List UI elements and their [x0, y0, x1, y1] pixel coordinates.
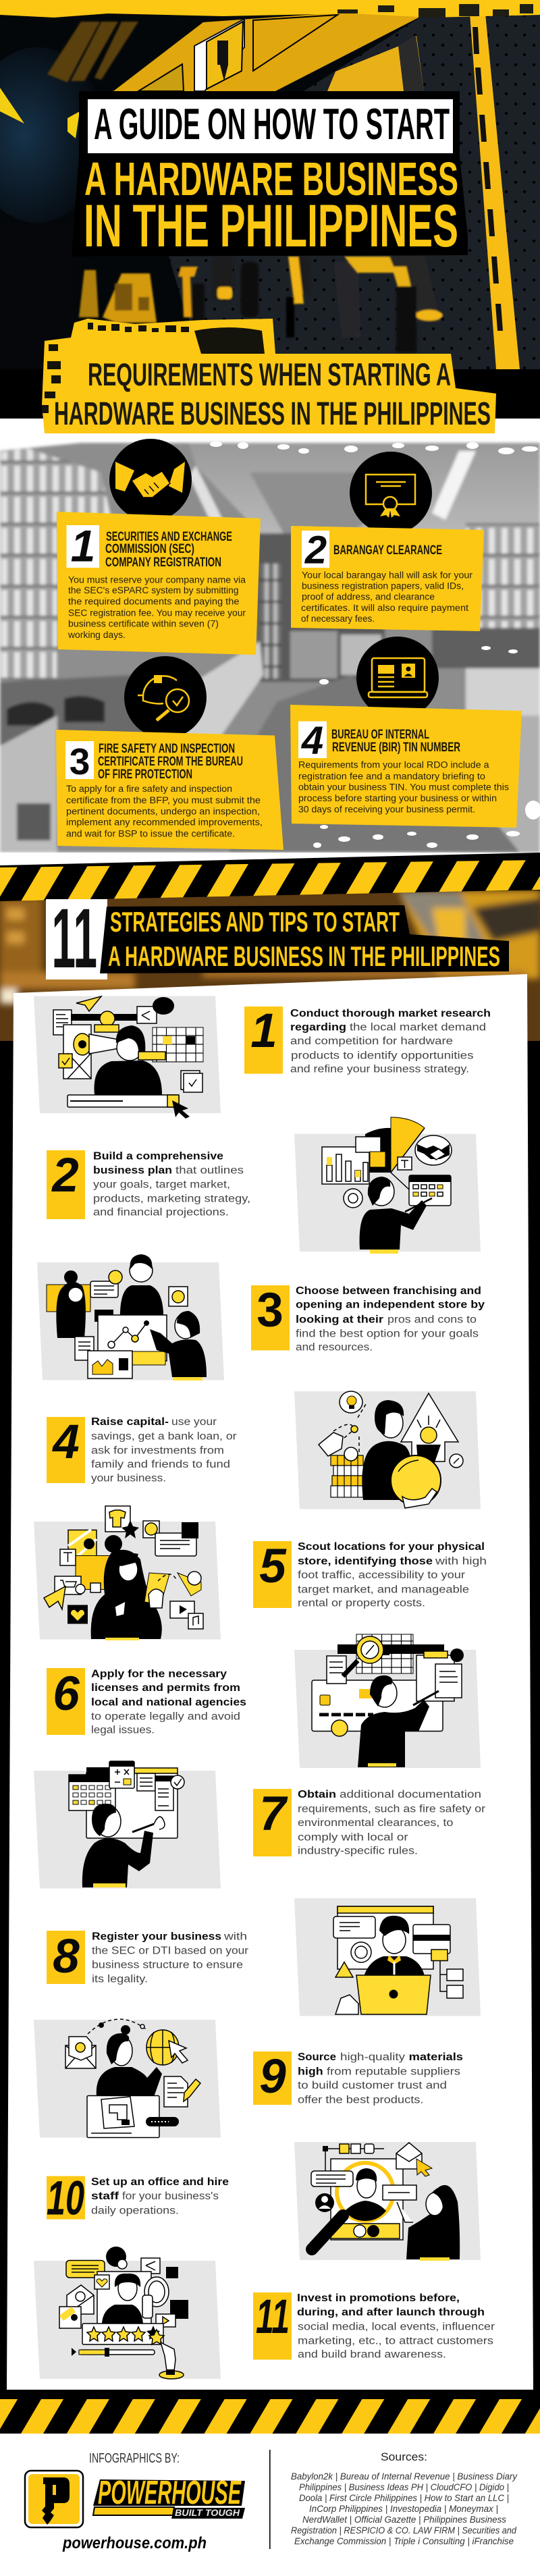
icon: handshake [109, 439, 192, 521]
step 5 text [298, 1541, 487, 1609]
step 7 text: industry-specific rules. [298, 1846, 418, 1856]
illustration: documentation [34, 1761, 221, 1889]
panel: requirement 2 barangay clearance [291, 452, 484, 631]
hero photo background: power tools on pegboard [0, 12, 540, 370]
step 2 text [93, 1150, 250, 1218]
step 3 text: and resources. [296, 1342, 373, 1353]
step 10 text: for your business's [122, 2191, 219, 2202]
number badge 4: 4 [51, 1416, 80, 1469]
step 9 text [298, 2051, 463, 2106]
11 block: 11 [51, 892, 97, 986]
body 4: obtain your business TIN. You must complete this [298, 782, 509, 793]
step 7 text: environmental clearances, to [298, 1817, 453, 1829]
illustration: sourcing materials online [34, 2019, 221, 2137]
step 5 [34, 1506, 487, 1640]
sources list: Exchange Commission | Triple i Consulting | iFranchise [294, 2536, 514, 2546]
step 6 text: local and national agencies [91, 1697, 246, 1708]
heading 3: FIRE SAFETY AND INSPECTION [99, 741, 235, 756]
step 9 text: high [298, 2066, 323, 2078]
number 2: 2 [304, 528, 327, 572]
body 3: To apply for a fire safety and inspection [66, 784, 232, 794]
illustration: scouting locations [34, 1506, 221, 1640]
number badge 11 [253, 2290, 292, 2360]
step 5 text: foot traffic, accessibility to your [298, 1569, 465, 1581]
body 2 [301, 570, 473, 624]
sources list: Babylon2k | Bureau of Internal Revenue | Business Diary [291, 2471, 518, 2481]
sources list [291, 2471, 518, 2546]
logo: powerhouse icon [25, 2471, 83, 2527]
step 2 text: and financial projections. [93, 1207, 229, 1218]
step 5 text: Scout locations for your physical [298, 1541, 485, 1553]
step 11 text: and build brand awareness. [298, 2349, 446, 2360]
step 8 text: business structure to ensure [92, 1959, 243, 1971]
step 9 [34, 2019, 463, 2137]
panel: requirement 3 fire safety [56, 656, 284, 850]
number badge 7: 7 [259, 1788, 288, 1841]
number badge 2 [47, 1149, 85, 1219]
number badge 2: 2 [51, 1149, 79, 1202]
step 1 text: and competition for hardware [290, 1036, 453, 1047]
sources list: Registration | RESPICIO & CO. LAW FIRM | Securities and [291, 2525, 516, 2535]
black sides behind strategies section [0, 871, 540, 2434]
number badge 1: 1 [250, 1004, 277, 1058]
illustration: franchise or independent store [37, 1254, 224, 1380]
step 8 text: its legality. [92, 1974, 148, 1985]
step 8 text: the SEC or DTI based on your [92, 1946, 248, 1956]
illustration: registering on a laptop [294, 1898, 481, 2016]
body 2: Your local barangay hall will ask for your [302, 570, 473, 581]
step 7 text: additional documentation [340, 1789, 481, 1800]
step 3 text: opening an independent store by [296, 1299, 485, 1311]
body 1: SEC registration fee. You may receive your [68, 608, 246, 618]
number badge 3: 3 [256, 1284, 284, 1337]
number badge 11: 11 [256, 2290, 290, 2344]
step 4 text [91, 1416, 236, 1484]
body 2: business registration papers, valid IDs, [302, 581, 464, 591]
step 4 text: Raise capital- [91, 1416, 169, 1428]
number badge 8 [47, 1930, 85, 1984]
step 9 text: Source [298, 2051, 336, 2063]
body 1: business certificate within seven (7) [68, 618, 219, 629]
step 8 [47, 1898, 481, 2016]
logo: powerhouse wordmark [93, 2475, 245, 2519]
step 9 text: offer the best products. [298, 2094, 424, 2106]
body 2: certificates. It will also require payment [301, 603, 468, 613]
step 2 text: Build a comprehensive [93, 1150, 223, 1162]
step 4 text: savings, get a bank loan, or [91, 1431, 236, 1442]
heading black banner [100, 905, 509, 973]
sources heading: Sources: [381, 2450, 427, 2463]
step 8 text: with [223, 1931, 247, 1943]
step 10 text: daily operations. [91, 2205, 179, 2217]
step 6 text: licenses and permits from [91, 1682, 240, 1694]
step 3 text: Choose between franchising and [296, 1285, 481, 1297]
hazard stripes upper [0, 853, 540, 901]
step 1 text: the local market demand [350, 1022, 486, 1033]
body 2: proof of address, and clearance [302, 591, 435, 602]
step 9 text: high-quality [340, 2051, 405, 2063]
white main panel [7, 974, 533, 2390]
heading 1: COMPANY REGISTRATION [105, 555, 221, 570]
sources list: NerdWallet | Official Gazette | Philippines Business [302, 2515, 506, 2525]
body 3: and wait for BSP to issue the certificate. [66, 829, 235, 838]
step 11 text [297, 2292, 495, 2360]
heading 3 [98, 741, 243, 782]
number badge 6: 6 [53, 1667, 80, 1721]
card 2 [291, 526, 484, 631]
body 1: the required documents and paying the [68, 597, 239, 606]
step 2 text: that outlines [176, 1165, 244, 1176]
step 11 text: Invest in promotions before, [297, 2292, 460, 2304]
heading 4: REVENUE (BIR) TIN NUMBER [332, 740, 460, 755]
step 6 text: Apply for the necessary [91, 1669, 227, 1680]
illustration: market research with telescope [34, 996, 221, 1119]
illustration: business plan [294, 1117, 481, 1254]
card 1 [57, 512, 261, 655]
step 6 text [91, 1669, 246, 1736]
step 6 text: to operate legally and avoid [91, 1711, 240, 1723]
website url: powerhouse.com.ph [62, 2534, 207, 2552]
sources list: Doola | First Circle Philippines | How to Start an LLC | [299, 2493, 509, 2503]
step 9 text: from reputable suppliers [327, 2066, 460, 2078]
step 5 text: store, identifying those [298, 1555, 433, 1567]
requirements heading banner [42, 319, 496, 433]
body 4 [298, 760, 509, 814]
icon: hard hat and magnifier [124, 656, 207, 739]
body 4: 30 days of receiving your business permit. [298, 805, 475, 814]
step 5 text: with high [435, 1555, 487, 1567]
sources list: Philippines | Business Ideas PH | CloudCFO | Digido | [299, 2482, 509, 2492]
number 4: 4 [301, 718, 323, 763]
step 7 [34, 1761, 485, 1889]
number badge 9 [253, 2050, 292, 2105]
step 7 text: requirements, such as fire safety or [298, 1804, 485, 1815]
number badge 7 [253, 1788, 292, 1856]
infographics by label: INFOGRAPHICS BY: [89, 2451, 180, 2466]
body 1: You must reserve your company name via [68, 575, 246, 585]
step 4 text: your business. [91, 1473, 166, 1484]
top grunge yellow band [0, 0, 540, 18]
heading 3: CERTIFICATE FROM THE BUREAU [98, 754, 243, 769]
body 3 [66, 784, 263, 838]
divider [269, 2450, 271, 2549]
illustration: hiring staff [294, 2142, 481, 2261]
body 1: working days. [68, 630, 126, 640]
section photo background: blurred drill [0, 891, 540, 1041]
body 1: the SEC's eSPARC system by submitting [68, 585, 239, 595]
strategies heading [46, 892, 509, 986]
sources list: InCorp Philippines | Investopedia | Moneymax | [309, 2504, 498, 2514]
step 2 text: your goals, target market, [93, 1179, 230, 1191]
illustration: promotions and reviews [34, 2247, 221, 2379]
step 2 text: business plan [93, 1165, 172, 1176]
body 4: Requirements from your local RDO include a [298, 760, 489, 770]
number badge 4 [47, 1416, 85, 1483]
step 1 text: Conduct thorough market research [290, 1008, 491, 1019]
11 block [46, 892, 107, 986]
step 11 text: during, and after launch through [297, 2307, 485, 2318]
number badge 1 [244, 1004, 283, 1074]
step 4 text: ask for investments from [91, 1445, 224, 1457]
step 6 text: legal issues. [91, 1724, 155, 1736]
icon: laptop with ID [356, 637, 439, 719]
step 11 text: social media, local events, influencer [298, 2321, 495, 2333]
step 4 text: use your [171, 1416, 217, 1428]
logo: powerhouse wordmark: POWERHOUSE [98, 2475, 242, 2511]
number 3: 3 [70, 741, 90, 782]
number badge 9: 9 [259, 2050, 286, 2103]
step 8 text [92, 1931, 248, 1985]
step 5 text: rental or property costs. [298, 1597, 425, 1609]
body 4: registration fee and a mandatory briefing to [298, 771, 485, 782]
body 3: pertinent documents, undergo an inspection, [66, 806, 260, 817]
card 3 [56, 730, 284, 850]
number badge 6 [47, 1667, 85, 1735]
step 10 text: Set up an office and hire [91, 2176, 229, 2188]
heading 3: OF FIRE PROTECTION [98, 767, 192, 782]
number 1: 1 [71, 521, 95, 571]
step 3 [37, 1254, 485, 1380]
heading 2: BARANGAY CLEARANCE [333, 543, 442, 558]
store photo background [0, 441, 540, 871]
step 1 text: regarding [290, 1022, 346, 1033]
step 2 [47, 1117, 481, 1254]
step 7 text: comply with local or [298, 1832, 408, 1843]
step 1 [34, 996, 491, 1119]
panel: requirement 4 BIR [290, 637, 522, 828]
step 1 text: and refine your business strategy. [290, 1064, 469, 1075]
hazard stripes lower [0, 2391, 540, 2434]
body 4: process before starting your business or within [298, 793, 497, 803]
footer [0, 2434, 540, 2576]
heading 4 [331, 727, 460, 755]
illustration: raising capital with coins [294, 1391, 481, 1509]
step 10 text: staff [91, 2191, 119, 2202]
heading 1: COMMISSION (SEC) [105, 541, 194, 556]
number badge 3 [251, 1284, 290, 1350]
step 8 text: Register your business [92, 1931, 221, 1943]
number badge 5: 5 [259, 1540, 287, 1593]
step 3 text: pros and cons to [387, 1314, 477, 1326]
logo: powerhouse wordmark: BUILT TOUGH [175, 2507, 240, 2518]
step 10 text [91, 2176, 229, 2217]
step 6 [47, 1634, 481, 1768]
card 4 [290, 705, 522, 828]
number badge 10: 10 [47, 2172, 84, 2225]
body 1 [68, 575, 246, 640]
step 7 text: Obtain [298, 1789, 336, 1800]
step 9 text: materials [409, 2051, 463, 2063]
panel: requirement 1 SEC registration [57, 439, 261, 655]
step 2 text: products, marketing strategy, [93, 1193, 250, 1204]
icon: certificate [350, 452, 432, 534]
number badge 8: 8 [53, 1930, 80, 1983]
heading 1: SECURITIES AND EXCHANGE [106, 529, 232, 544]
step 3 text: looking at their [296, 1314, 383, 1326]
illustration: licences and permits [294, 1634, 481, 1768]
step 4 [47, 1391, 481, 1509]
step 9 text: to build customer trust and [298, 2080, 447, 2091]
black band and white torn edge under hero [0, 369, 540, 450]
step 10 [47, 2142, 481, 2261]
step 3 text: find the best option for your goals [296, 1329, 479, 1339]
body 3: certificate from the BFP, you must submit the [66, 795, 261, 805]
step 4 text: family and friends to fund [91, 1459, 230, 1470]
step 7 text [298, 1789, 485, 1856]
heading 1 [105, 529, 232, 570]
heading 4: BUREAU OF INTERNAL [331, 727, 429, 742]
step 11 text: marketing, etc., to attract customers [298, 2336, 493, 2346]
step 1 text [290, 1008, 491, 1075]
number badge 5 [253, 1540, 292, 1608]
title block [72, 91, 468, 259]
step 11 [34, 2247, 495, 2379]
step 1 text: products to identify opportunities [291, 1050, 474, 1061]
step 5 text: target market, and manageable [298, 1584, 469, 1596]
step 3 text [296, 1285, 485, 1353]
body 3: implement any recommended improvements, [66, 817, 263, 828]
body 2: of necessary fees. [301, 614, 375, 624]
